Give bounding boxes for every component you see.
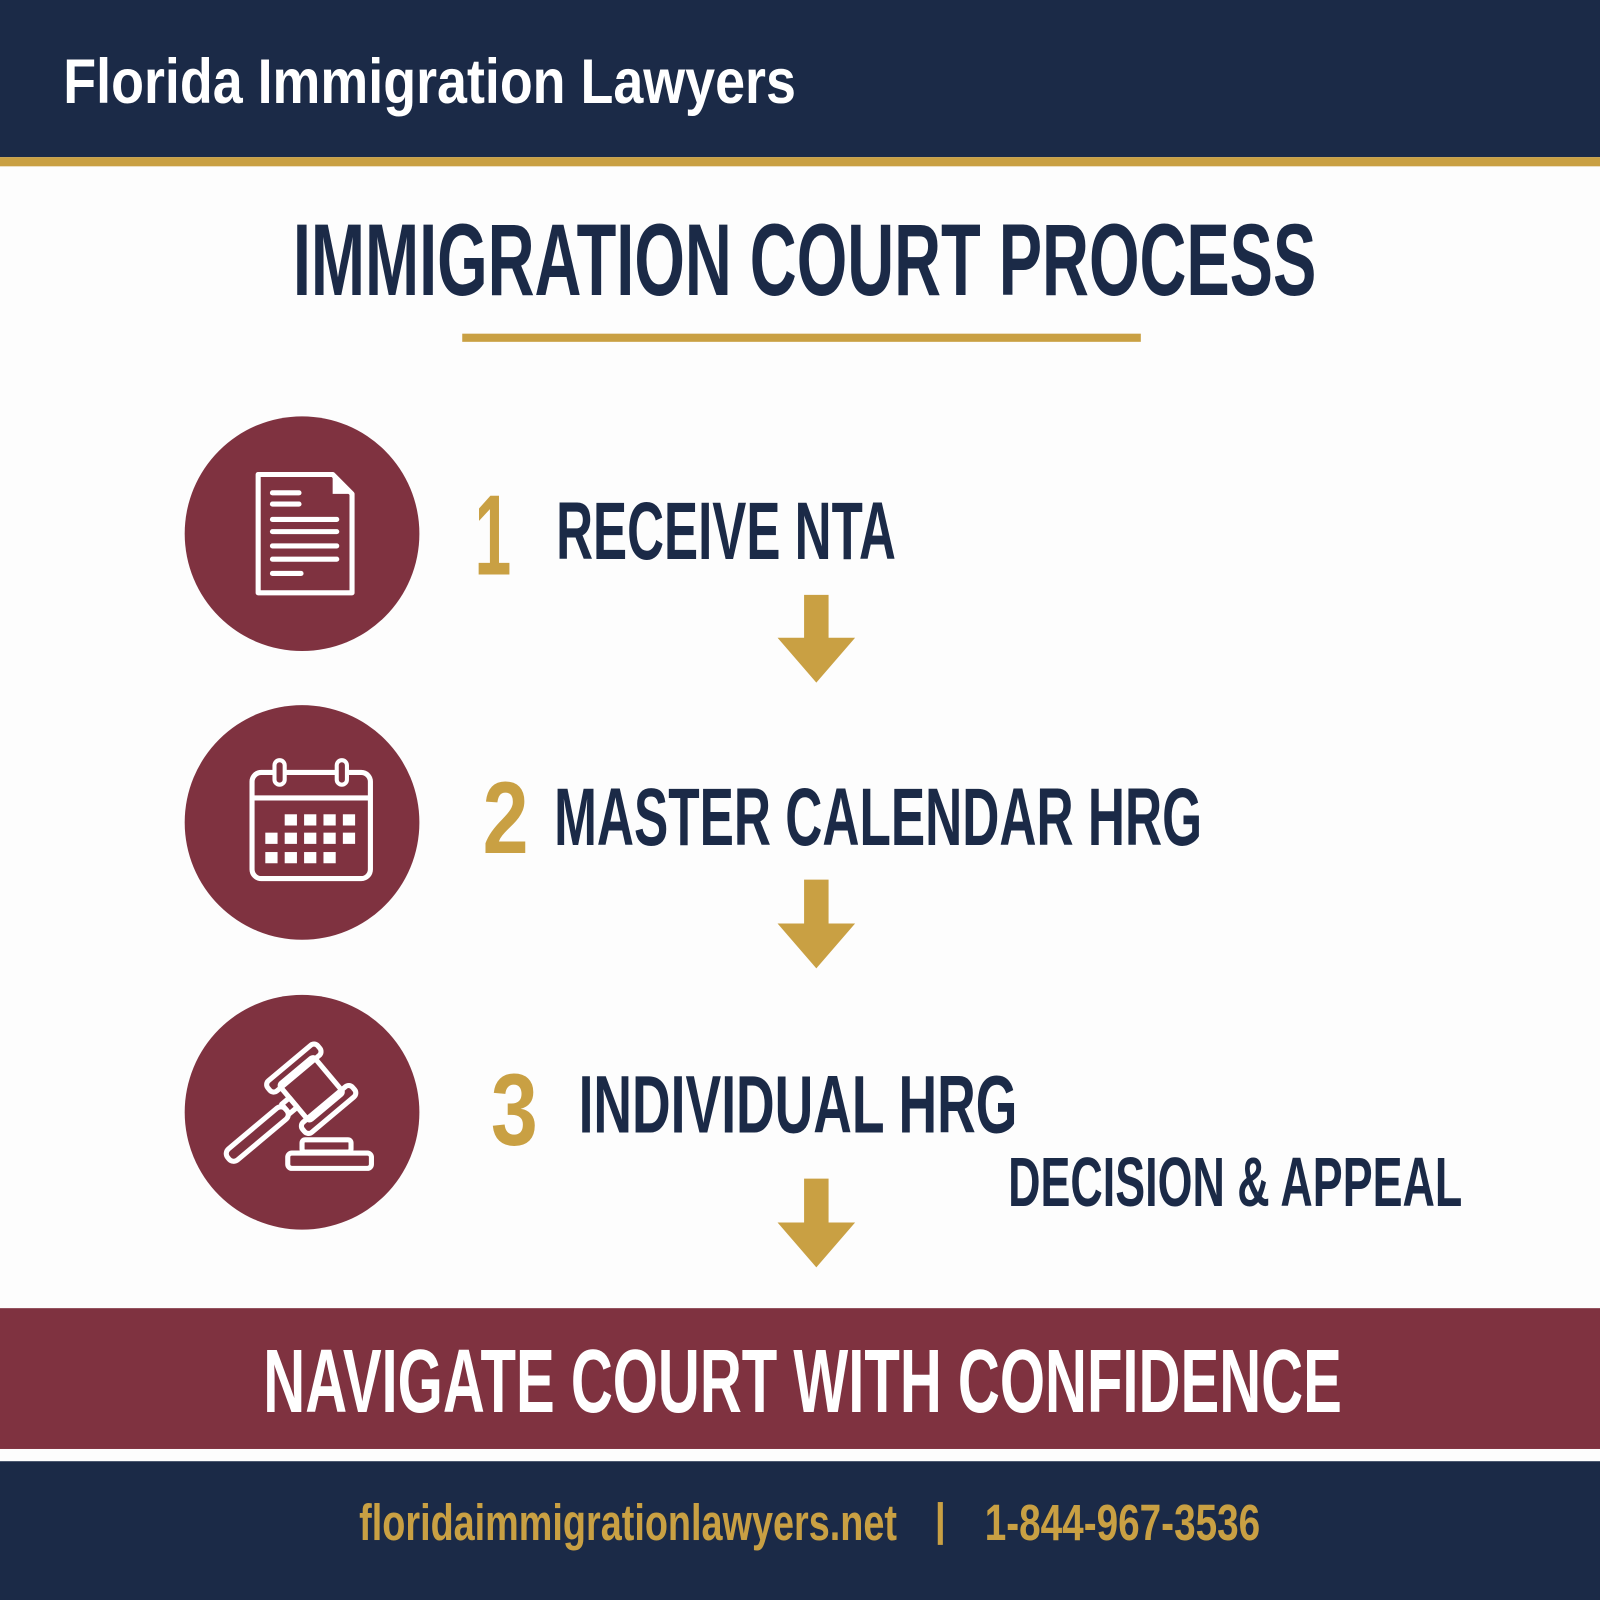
step 1 bbox=[185, 416, 896, 651]
step number 2: 2 bbox=[483, 761, 529, 875]
arrow 3 bbox=[778, 1179, 855, 1267]
icon: gavel bbox=[185, 995, 419, 1230]
header title: Florida Immigration Lawyers bbox=[63, 47, 796, 117]
step number 1: 1 bbox=[474, 472, 511, 599]
footer website: floridaimmigrationlawyers.net bbox=[359, 1494, 897, 1551]
icon: document bbox=[185, 416, 419, 651]
step label 3: INDIVIDUAL HRG bbox=[579, 1060, 1017, 1151]
arrow 1 bbox=[778, 595, 855, 683]
header bar bbox=[0, 0, 1600, 166]
step 3 bbox=[185, 995, 1462, 1230]
step 2 bbox=[185, 705, 1202, 940]
arrow 2 bbox=[778, 880, 855, 968]
footer phone: 1-844-967-3536 bbox=[985, 1494, 1260, 1551]
step label 1: RECEIVE NTA bbox=[556, 486, 896, 577]
title underline bbox=[462, 334, 1141, 342]
banner: navigate court bbox=[0, 1308, 1600, 1449]
step label 2: MASTER CALENDAR HRG bbox=[554, 772, 1202, 863]
icon: calendar bbox=[185, 705, 419, 940]
footer bbox=[0, 1461, 1600, 1600]
step number 3: 3 bbox=[491, 1053, 538, 1167]
